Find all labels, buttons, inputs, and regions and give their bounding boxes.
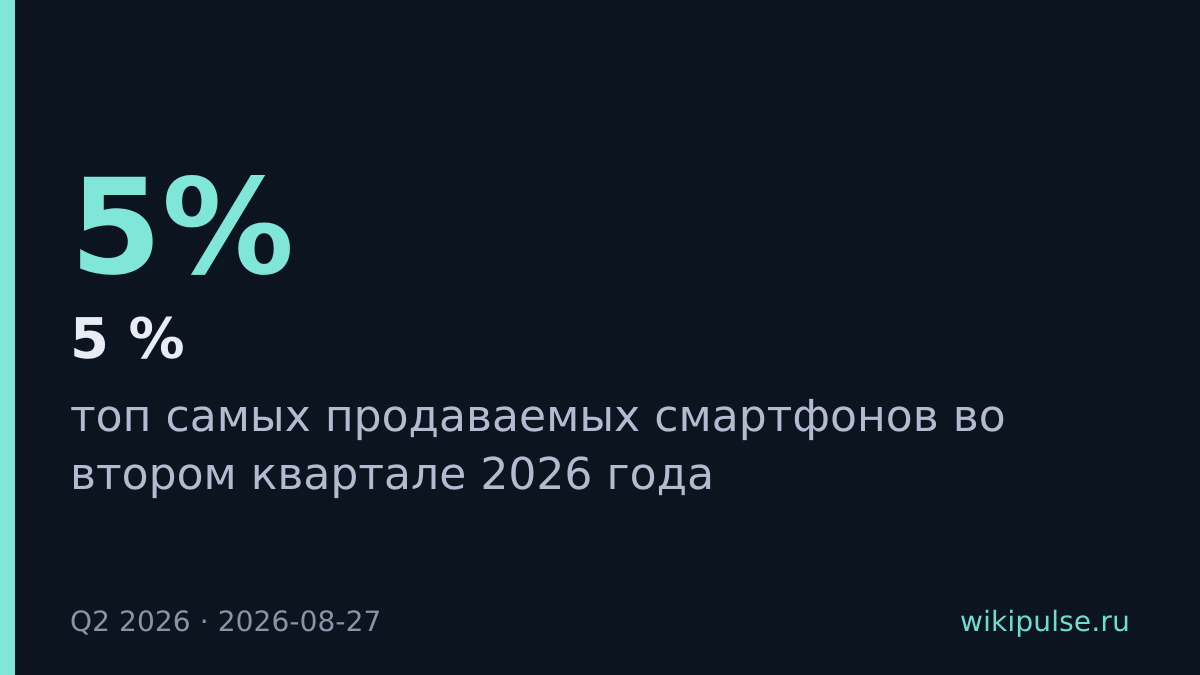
subheading: 5 % [70,307,185,372]
accent bar [0,0,15,675]
description: втором квартале 2026 года [70,449,714,500]
description: топ самых продаваемых смартфонов во [70,391,1006,442]
source: wikipulse.ru [960,605,1130,638]
date line: Q2 2026 · 2026-08-27 [70,605,381,638]
description [70,391,1006,500]
big number: 5% [70,151,294,305]
